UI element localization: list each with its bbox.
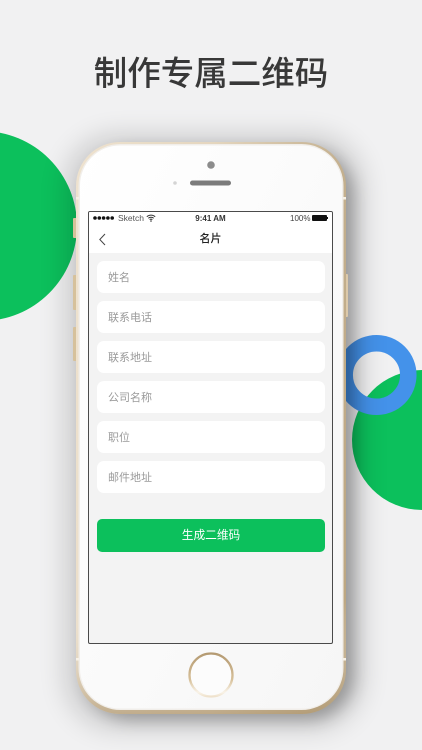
field: job title: 职位 <box>108 432 130 444</box>
phone body <box>73 142 348 714</box>
field: email <box>97 461 325 493</box>
battery <box>290 214 328 223</box>
speaker <box>190 180 231 186</box>
title: 制作专属二维码 <box>94 56 328 93</box>
screen <box>88 211 333 644</box>
generate button <box>97 519 325 552</box>
camera <box>207 161 215 169</box>
phone shadow <box>66 136 362 728</box>
carrier: Sketch <box>118 213 144 223</box>
signal dots <box>93 216 114 220</box>
field: job title <box>97 421 325 453</box>
field: company: 公司名称 <box>108 392 152 404</box>
home button <box>190 654 232 696</box>
status and navigation bar <box>89 212 332 253</box>
field: phone: 联系电话 <box>108 312 152 324</box>
field: phone <box>97 301 325 333</box>
icon: back chevron <box>99 234 106 246</box>
sensor <box>173 181 177 185</box>
field: name <box>97 261 325 293</box>
field: email: 邮件地址 <box>108 472 152 484</box>
green circle right <box>352 370 422 510</box>
phone <box>73 142 348 714</box>
clock: 9:41 AM <box>195 214 226 223</box>
field: address <box>97 341 325 373</box>
battery: 100% <box>290 214 310 223</box>
field: company <box>97 381 325 413</box>
icon: wifi <box>146 214 156 222</box>
field: name: 姓名 <box>108 272 130 284</box>
field: address: 联系地址 <box>108 352 152 364</box>
blue ring <box>345 343 408 407</box>
green circle left <box>0 131 77 321</box>
generate button: 生成二维码 <box>182 529 240 542</box>
screen title: 名片 <box>200 233 222 245</box>
